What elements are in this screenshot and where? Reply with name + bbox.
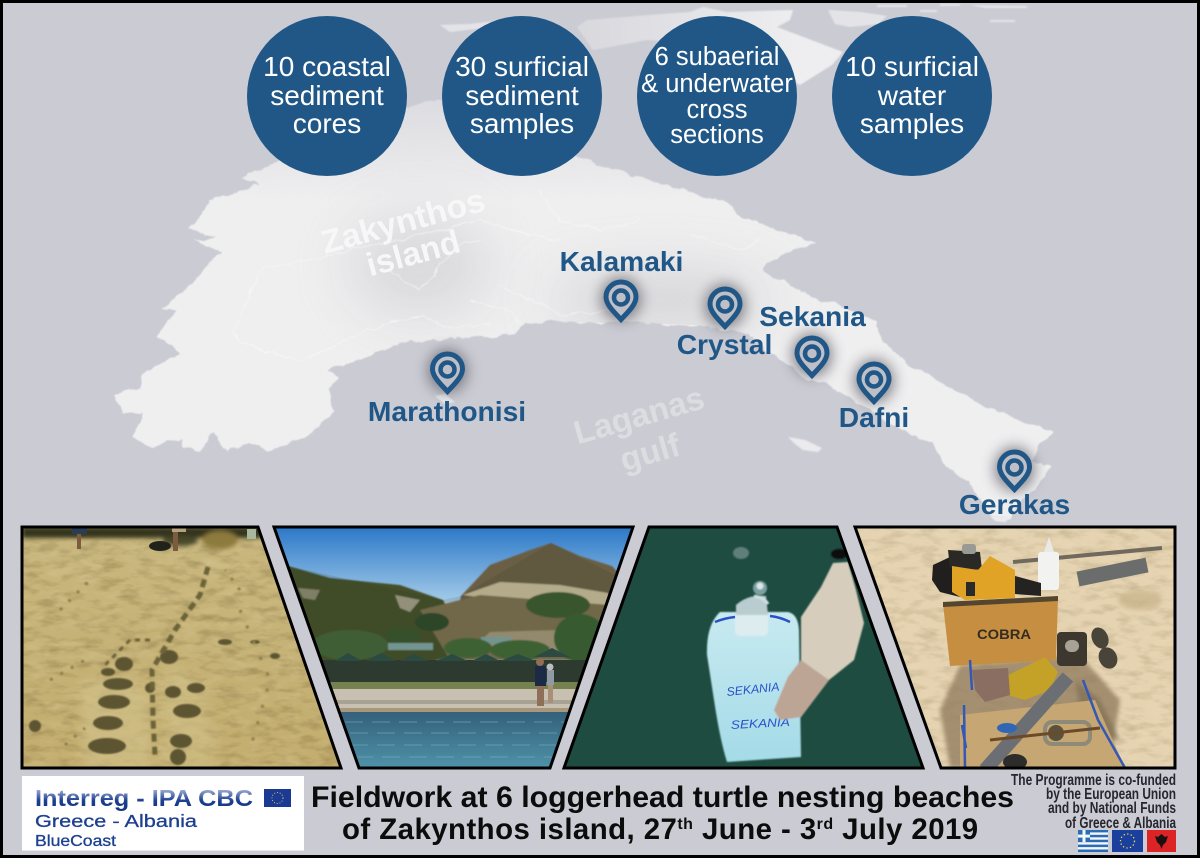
circle: coastal sediment cores: 10 coastal bbox=[263, 51, 391, 82]
pin: Dafni bbox=[854, 359, 894, 403]
funding note bbox=[1011, 772, 1176, 832]
location pins bbox=[428, 277, 1034, 491]
photo: water sample bottle held underwater: SEKANIA bbox=[730, 715, 790, 732]
photo: COBRA coring equipment on the beach bbox=[855, 527, 1175, 770]
hand holding bottle bbox=[774, 549, 864, 720]
beach name labels bbox=[368, 245, 1070, 520]
corer tools bbox=[1045, 722, 1090, 744]
map label: Zakynthos island: Zakynthos bbox=[317, 181, 489, 261]
circle: coastal sediment cores: cores bbox=[293, 108, 361, 139]
pin: Sekania bbox=[792, 333, 832, 377]
circle: cross sections: & underwater bbox=[641, 70, 793, 98]
beach name labels: Crystal bbox=[677, 328, 772, 360]
title: th bbox=[677, 816, 693, 833]
engine parts bbox=[1057, 632, 1087, 666]
circle: coastal sediment cores bbox=[247, 16, 407, 176]
icon: EU flag bbox=[264, 789, 291, 807]
pin: Kalamaki bbox=[601, 277, 641, 321]
wipes tub bbox=[1038, 552, 1059, 590]
beach name labels: Dafni bbox=[839, 401, 909, 433]
title: June - 3 bbox=[693, 813, 817, 846]
stat circles bbox=[247, 16, 992, 176]
title: July 2019 bbox=[834, 813, 979, 846]
wooden box bbox=[943, 598, 1058, 666]
map label: Laganas gulf: Laganas bbox=[569, 379, 708, 451]
logo: Interreg IPA CBC Greece - Albania BlueCoast bbox=[22, 776, 304, 850]
photo: water sample bottle held underwater bbox=[560, 527, 930, 768]
circle: cross sections: sections bbox=[670, 121, 764, 149]
beach name labels: Gerakas bbox=[959, 488, 1070, 520]
stick and grey tube bbox=[1013, 548, 1162, 562]
circle: surficial sediment samples: samples bbox=[470, 108, 574, 139]
photo: turtle tracks on sand bbox=[22, 527, 342, 768]
circle: cross sections: cross bbox=[687, 96, 747, 124]
logo: Interreg IPA CBC Greece - Albania BlueCoast: Greece - Albania bbox=[35, 811, 197, 831]
flags bbox=[1078, 830, 1176, 852]
photo: water sample bottle held underwater: SEKANIA bbox=[726, 680, 780, 699]
circle: cross sections: 6 subaerial bbox=[655, 43, 779, 71]
sample bottle bbox=[707, 547, 801, 762]
title bbox=[311, 781, 1014, 846]
small islets bbox=[435, 394, 1012, 522]
wood board bbox=[960, 700, 1125, 768]
map label: Laganas gulf: gulf bbox=[616, 426, 685, 478]
circle: surficial water samples: water bbox=[877, 80, 946, 111]
circle: surficial sediment samples bbox=[442, 16, 602, 176]
grey pipe bbox=[985, 677, 1068, 770]
title: of Zakynthos island, 27 bbox=[342, 813, 677, 846]
beach name labels: Kalamaki bbox=[560, 245, 683, 277]
map of Zakynthos island bbox=[113, 4, 1053, 522]
blue tape lines bbox=[962, 660, 1125, 768]
circle: cross sections bbox=[637, 16, 797, 176]
circle: surficial water samples: 10 surficial bbox=[845, 51, 979, 82]
circle: coastal sediment cores: sediment bbox=[270, 80, 384, 111]
gloves and bag bbox=[1008, 657, 1058, 700]
circle: surficial sediment samples: sediment bbox=[465, 80, 579, 111]
circle: surficial water samples bbox=[832, 16, 992, 176]
icon: Albanian flag bbox=[1147, 830, 1176, 852]
island land mass bbox=[113, 99, 1053, 517]
beach name labels: Sekania bbox=[759, 300, 866, 332]
circle: surficial sediment samples: 30 surficial bbox=[455, 51, 589, 82]
mainland fragments at top bbox=[440, 4, 1027, 85]
pin: Crystal bbox=[705, 284, 745, 328]
logo: Interreg IPA CBC Greece - Albania BlueCoast: Interreg - IPA CBC bbox=[35, 785, 253, 811]
logo: Interreg IPA CBC Greece - Albania BlueCoast: BlueCoast bbox=[35, 833, 117, 850]
photo: COBRA coring equipment on the beach: COBRA bbox=[977, 626, 1031, 642]
beach name labels: Marathonisi bbox=[368, 395, 526, 427]
pin: Gerakas bbox=[994, 447, 1034, 491]
machine bbox=[932, 557, 960, 597]
map label: Zakynthos island: island bbox=[362, 223, 464, 283]
title: rd bbox=[817, 816, 834, 833]
title: Fieldwork at 6 loggerhead turtle nesting beaches bbox=[311, 781, 1014, 814]
circle: surficial water samples: samples bbox=[860, 108, 964, 139]
icon: Greek flag bbox=[1078, 830, 1108, 852]
photo: beach with hills and umbrellas bbox=[274, 527, 634, 770]
pin: Marathonisi bbox=[428, 349, 468, 393]
icon: EU flag bbox=[1112, 830, 1143, 852]
